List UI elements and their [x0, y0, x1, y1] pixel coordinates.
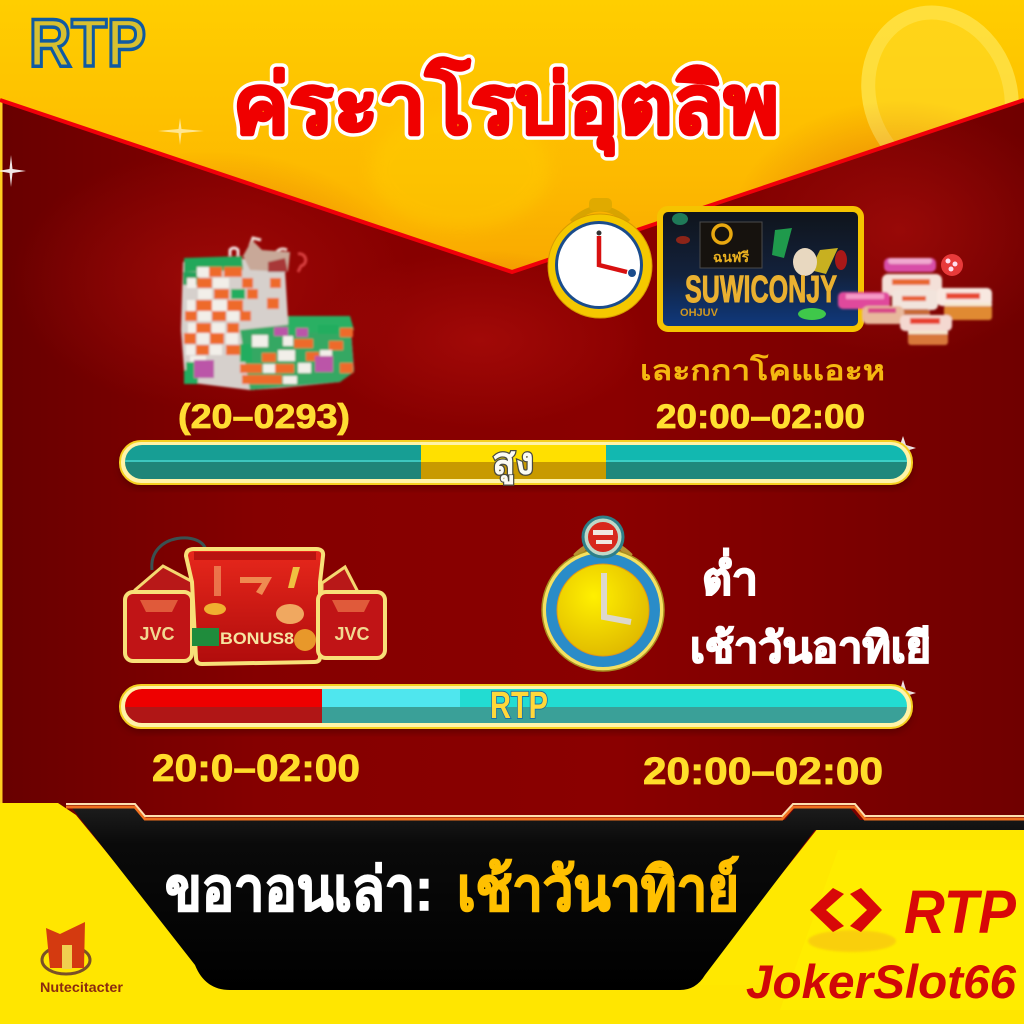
icon: stacked chip boot [181, 238, 354, 390]
banner text: ขอาอนเล่า: [165, 856, 433, 923]
label: time range lower left: 20:0–02:00 [152, 748, 360, 790]
logo: bottom left: Nutecitacter [40, 979, 124, 995]
icon: red slot box with bags: BONUS8 [220, 629, 294, 648]
bar: high RTP [120, 441, 912, 488]
label: sunday morning: เช้าวันอาทิเยี [690, 624, 931, 671]
bar label: high: สูง [492, 441, 534, 485]
footer: yellow side panels [0, 803, 1024, 1024]
decorative smudge [808, 930, 896, 952]
label: time range right: 20:00–02:00 [656, 398, 865, 436]
game card [660, 209, 861, 329]
label: time range lower right: 20:00–02:00 [643, 751, 883, 793]
brand: RTP: RTP [904, 878, 1016, 946]
header background: yellow [0, 0, 1024, 300]
footer: black banner [66, 804, 1024, 990]
icon: red slot box with bags: JVC [139, 624, 175, 644]
title: ค่ระาโรบ่อุตลิพ [233, 58, 779, 156]
icon: red chevrons [810, 888, 882, 932]
title: ค่ระาโรบ่อุตลิพ [233, 58, 779, 156]
label: low: ต่ำ [702, 548, 758, 604]
game card: OHJUV [680, 307, 719, 319]
panel: red main area [0, 100, 1024, 830]
brand: JokerSlot66: JokerSlot66 [746, 955, 1017, 1008]
bar: low RTP [120, 685, 912, 732]
icon: chip piles [838, 254, 992, 345]
icon: blue and yellow clock [542, 517, 664, 671]
logo: bottom left [40, 922, 124, 995]
game card: ฉนฬรี [713, 249, 750, 265]
banner text: เช้าวันาทิาย์ [457, 856, 739, 923]
icon: red slot box with bags [125, 538, 385, 664]
bar label: RTP: RTP [490, 685, 548, 727]
icon: gold clock [548, 198, 652, 318]
sparkles [0, 118, 916, 706]
icon: red slot box with bags: JVC [334, 624, 370, 644]
game card: SUWICONJY [685, 269, 837, 311]
banner text [165, 856, 739, 923]
label: yellow caption: เละกกาโคแเอะห [640, 353, 885, 386]
label: date range left: (20–0293) [178, 398, 350, 436]
logo: RTP top left: RTP [29, 5, 146, 81]
